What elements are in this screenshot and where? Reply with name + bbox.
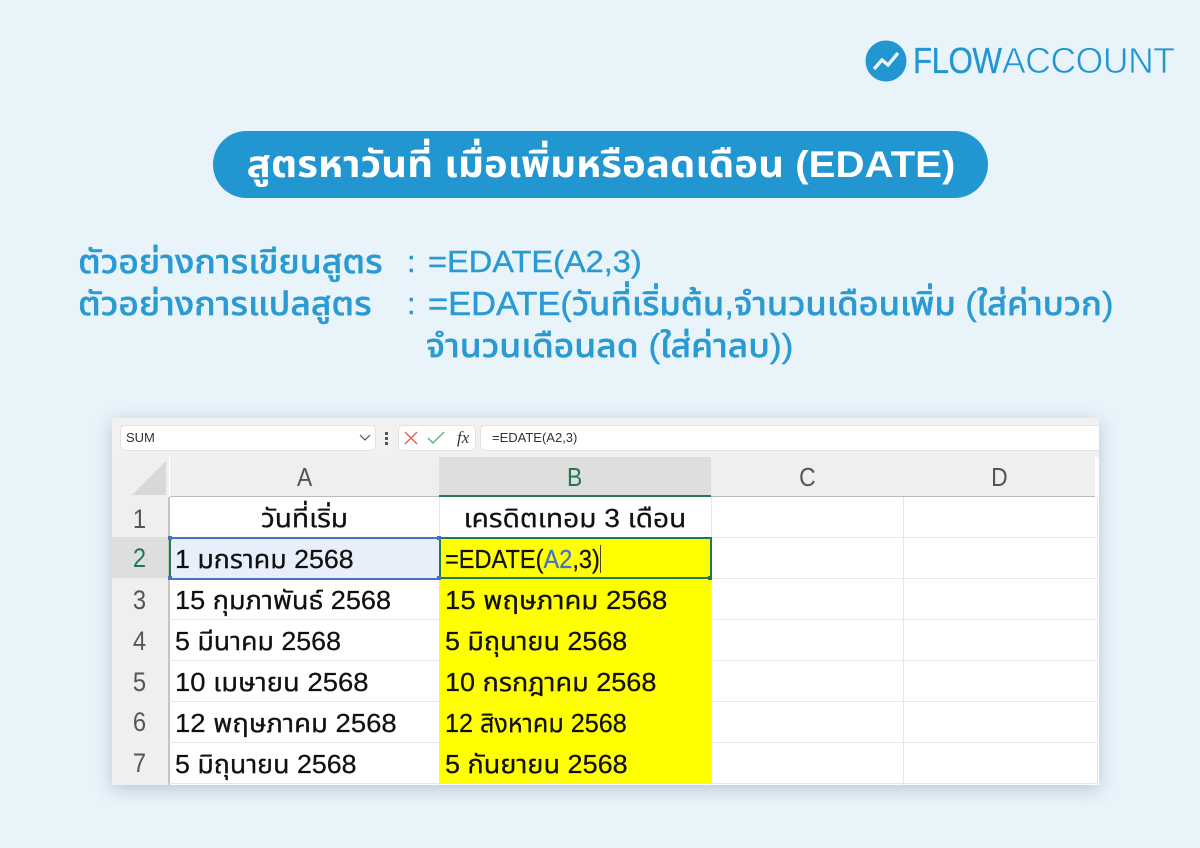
title pill [213, 131, 988, 198]
title pill: สูตรหาวันที่ เมื่อเพิ่มหรือลดเดือน (EDATE) [246, 144, 955, 185]
formula input: =EDATE(A2,3) [492, 430, 577, 445]
cell A6: 12 พฤษภาคม 2568 [175, 708, 397, 738]
text block: formula example [78, 243, 1113, 364]
row 3 number: 3 [133, 585, 147, 615]
column B header: B [567, 462, 583, 492]
formula input [480, 425, 1112, 451]
column headers [112, 457, 169, 497]
formula: translation example: =EDATE(วันที่เริ่มต้น,จำนวนเดือนเพิ่ม (ใส่ค่าบวก) [428, 285, 1113, 322]
column A header [170, 457, 439, 497]
cell B6: 12 สิงหาคม 2568 [445, 708, 627, 738]
column C header [711, 457, 903, 497]
spreadsheet screenshot [112, 418, 1099, 785]
column D header [903, 457, 1095, 497]
formula: writing example: =EDATE(A2,3) [428, 244, 642, 279]
formula: translation continued: จำนวนเดือนลด (ใส่ค่าลบ)) [426, 327, 793, 364]
column B header [439, 457, 711, 497]
label: writing example: ตัวอย่างการเขียนสูตร [78, 243, 383, 280]
column A header: A [297, 462, 312, 492]
icon: dropdown [360, 434, 370, 441]
icon: more dots [385, 432, 388, 435]
cell B4: 5 มิถุนายน 2568 [445, 626, 627, 656]
logo: FlowAccount [866, 40, 1175, 82]
row 4 number: 4 [133, 626, 147, 656]
selection handles [168, 536, 712, 580]
name box: SUM [126, 430, 155, 445]
column C header: C [799, 462, 815, 492]
selected cell B2 [439, 537, 712, 579]
name box [120, 425, 376, 451]
row 2 number: 2 [133, 543, 147, 573]
cell A3: 15 กุมภาพันธ์ 2568 [175, 585, 391, 615]
row 7 number: 7 [133, 748, 147, 778]
yellow result column [439, 537, 711, 783]
logo wordmark ACCOUNT: ACCOUNT [1002, 40, 1175, 81]
logo wordmark FLOW: FLOW [913, 40, 1001, 81]
cell B2 formula: =EDATE(A2,3) [445, 544, 600, 574]
icon: select all triangle [132, 461, 166, 495]
row 2 number [112, 537, 168, 578]
cell A4: 5 มีนาคม 2568 [175, 626, 341, 656]
cell B1: เครดิตเทอม 3 เดือน [464, 503, 686, 533]
cell A7: 5 มิถุนายน 2568 [175, 749, 357, 779]
cell A2: 1 มกราคม 2568 [175, 544, 354, 574]
cell B7: 5 กันยายน 2568 [445, 749, 628, 779]
label: translation example: ตัวอย่างการแปลสูตร [78, 285, 372, 322]
row 1 number: 1 [133, 504, 147, 534]
formula buttons [398, 425, 476, 451]
row 6 number: 6 [133, 707, 147, 737]
cell B5: 10 กรกฎาคม 2568 [445, 667, 656, 697]
icon: fx: fx [457, 428, 469, 447]
cell B3: 15 พฤษภาคม 2568 [445, 585, 667, 615]
icon: logo circle with trend line [866, 40, 906, 82]
colon: writing example: : [407, 244, 416, 279]
column D header: D [991, 462, 1007, 492]
corner [112, 457, 169, 497]
row headers [112, 497, 170, 785]
icon: confirm [428, 432, 444, 444]
row 5 number: 5 [133, 667, 147, 697]
cell A5: 10 เมษายน 2568 [175, 667, 369, 697]
icon: cancel [404, 432, 418, 444]
colon: translation example: : [407, 286, 416, 321]
selected cell A2 [169, 537, 441, 580]
formula bar strip [112, 418, 1099, 457]
cell A1: วันที่เริ่ม [261, 503, 348, 533]
